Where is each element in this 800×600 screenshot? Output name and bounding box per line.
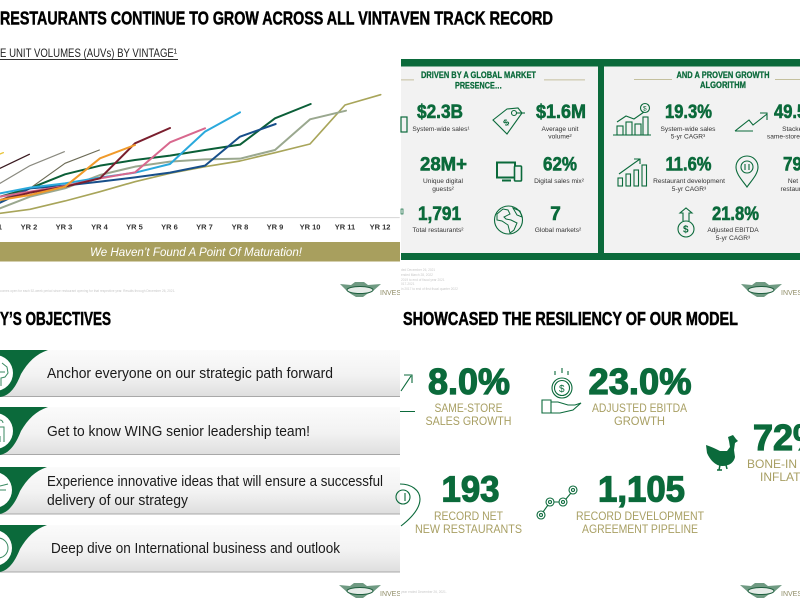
icon: money bag arrow xyxy=(678,208,694,237)
x-axis year labels: YR 6 xyxy=(161,222,178,232)
stat: adjusted EBITDA CAGR: 21.8% xyxy=(712,204,759,225)
stat: adjusted EBITDA growth: GROWTH xyxy=(614,414,665,428)
stat: net restaurants: Net xyxy=(788,178,798,185)
stat: average unit volume: volume² xyxy=(548,134,573,140)
footnote: comes open for each 52-week period since restaurant opening for that respective year. Results through December 26, 2021. xyxy=(0,289,175,293)
stat: restaurant development CAGR: 5-yr CAGR³ xyxy=(672,186,707,193)
stat: record net new restaurants: RECORD NET xyxy=(434,509,504,523)
stat: record net new restaurants: 193 xyxy=(442,468,500,510)
icon: money bag arrow: $ xyxy=(683,224,689,236)
heading: proven growth algorithm: AND A PROVEN GROWTH xyxy=(676,70,770,80)
stat: restaurant development CAGR xyxy=(653,154,725,193)
stat: global markets: Global markets² xyxy=(535,227,582,234)
stat: system-wide sales CAGR: System-wide sales xyxy=(661,126,716,133)
icon: growing bars xyxy=(618,159,646,186)
objective row 3: Experience innovative ideas that will ensure a successful xyxy=(47,474,383,490)
stat: global markets: 7 xyxy=(550,204,561,225)
stat: restaurant development CAGR: Restaurant development xyxy=(653,178,725,185)
x-axis year labels: YR 3 xyxy=(56,222,72,232)
footnotes xyxy=(401,268,458,291)
stat: net restaurants xyxy=(780,156,800,191)
heading: global market presence xyxy=(401,71,585,89)
title: restaurants continue to grow: RESTAURANTS CONTINUE TO GROW ACROSS ALL VINTA xyxy=(0,8,400,28)
panel: resiliency slide xyxy=(396,309,800,598)
stat: unique digital guests: guests² xyxy=(432,186,455,193)
footnotes: 2019 to end of fiscal year 2021 xyxy=(401,278,445,282)
stat: adjusted EBITDA CAGR: Adjusted EBITDA xyxy=(707,227,759,234)
logo: wings: INVESTOR xyxy=(380,290,416,297)
stat: system-wide sales: System-wide sales¹ xyxy=(412,126,470,133)
line chart: AUV by vintage xyxy=(0,95,399,218)
stat: same-store sales growth xyxy=(426,361,512,428)
stat: same-store sales growth: SAME-STORE xyxy=(434,401,502,415)
chart subtitle: E UNIT VOLUMES (AUVs) BY VINTAGE¹ xyxy=(0,46,177,60)
stat: adjusted EBITDA growth: ADJUSTED EBITDA xyxy=(592,401,687,415)
logo: wings xyxy=(340,282,400,297)
callout banner: maturation: We Haven’t Found A Point Of Maturation! xyxy=(90,247,303,259)
stat: unique digital guests: Unique digital xyxy=(423,178,464,185)
icon: price tag: $ xyxy=(501,117,511,128)
stat: average unit volume xyxy=(536,102,586,140)
stat: stacked same-store sales xyxy=(767,104,800,138)
stat: system-wide sales CAGR xyxy=(661,102,716,140)
icon: hand with coin: $ xyxy=(559,384,565,395)
stat: total restaurants xyxy=(400,206,464,232)
stat: unique digital guests: 28M+ xyxy=(420,154,467,176)
heading: proven growth algorithm: ALGORITHM xyxy=(700,80,746,90)
icon: connected nodes xyxy=(537,486,577,519)
stat: adjusted EBITDA CAGR: 5-yr CAGR³ xyxy=(716,235,751,242)
x-axis year labels: YR 11 xyxy=(335,222,355,232)
panel: proven track record slide xyxy=(400,8,800,297)
objective row 3: delivery of our strategy xyxy=(47,493,189,509)
stat: same-store sales growth: SALES GROWTH xyxy=(426,414,512,428)
panel: AUV growth chart slide xyxy=(0,8,416,297)
title: proven track record: VEN TRACK RECORD xyxy=(400,8,553,28)
stat: digital sales mix xyxy=(534,156,584,184)
icon: devices xyxy=(497,162,522,181)
title: objectives: Y’S OBJECTIVES xyxy=(0,309,111,329)
x-axis year labels: YR 9 xyxy=(267,222,283,232)
objective row 2 xyxy=(0,407,400,455)
x-axis year labels: YR 10 xyxy=(300,222,320,232)
footnotes: 017-2021 xyxy=(401,282,415,286)
stat: global markets xyxy=(535,206,582,232)
icon: growth arrow xyxy=(400,375,415,412)
logo: wings xyxy=(740,583,800,598)
stat: record development pipeline: 1,105 xyxy=(598,468,685,510)
footnotes: ded December 26, 2021 xyxy=(401,268,435,272)
objective row 4 xyxy=(0,525,400,572)
stat: total restaurants: 1,791 xyxy=(418,204,461,225)
x-axis year labels: YR 8 xyxy=(232,222,248,232)
logo: wings: INVESTOR xyxy=(380,591,416,598)
stat: record development pipeline: AGREEMENT PIPELINE xyxy=(582,522,698,536)
x-axis year labels xyxy=(0,224,390,230)
stat: adjusted EBITDA growth: 23.0% xyxy=(588,361,692,402)
stat: record net new restaurants: NEW RESTAURANTS xyxy=(415,522,522,536)
stat: system-wide sales CAGR: 19.3% xyxy=(665,102,712,123)
stat: system-wide sales CAGR: 5-yr CAGR³ xyxy=(671,134,706,140)
footnotes: ended March 28, 2022 xyxy=(401,273,433,277)
stat: restaurant development CAGR: 11.6% xyxy=(666,154,712,176)
footnotes: in 2017 to end of first fiscal quarter 2022 xyxy=(401,287,458,291)
x-axis year labels: YR 12 xyxy=(370,222,390,232)
heading: global market presence: DRIVEN BY A GLOBAL MARKET xyxy=(421,70,536,80)
stat: total restaurants: Total restaurants² xyxy=(413,227,464,234)
heading: global market presence: PRESENCE… xyxy=(455,80,502,90)
stat: adjusted EBITDA CAGR xyxy=(707,204,759,242)
stat: adjusted EBITDA growth xyxy=(588,361,692,428)
stat: same-store sales growth: 8.0% xyxy=(428,361,510,402)
x-axis year labels: YR 5 xyxy=(126,222,143,232)
objective row 4: Deep dive on International business and outlook xyxy=(51,541,341,557)
footnote: year ended December 26, 2021. xyxy=(401,590,447,594)
icon: bar chart with coin xyxy=(613,104,651,135)
logo: wings xyxy=(741,282,800,297)
stat: bone-in wing inflation xyxy=(747,417,800,484)
stat: average unit volume: Average unit xyxy=(542,126,579,133)
stat: digital sales mix: 62% xyxy=(543,154,577,176)
icon: hand with coin xyxy=(542,368,581,413)
x-axis year labels: YR 7 xyxy=(196,222,213,232)
panel: objectives slide xyxy=(0,309,416,598)
objective row 1: Anchor everyone on our strategic path forward xyxy=(47,366,333,382)
x-axis year labels: YR 4 xyxy=(91,222,109,232)
objective row 1 xyxy=(0,350,400,397)
objective row 3 xyxy=(0,467,400,514)
callout banner: maturation xyxy=(0,242,400,262)
frame: green bars xyxy=(401,59,800,260)
icon: globe xyxy=(494,206,522,234)
logo: wings xyxy=(339,583,416,598)
stat: average unit volume: $1.6M xyxy=(536,102,586,123)
stat: record development pipeline: RECORD DEVELOPMENT xyxy=(576,509,705,523)
icon: location pin xyxy=(736,156,758,187)
stat: digital sales mix: Digital sales mix² xyxy=(534,178,585,185)
x-axis year labels: YR 2 xyxy=(21,222,37,232)
stat: record development pipeline xyxy=(576,468,705,536)
stat: record net new restaurants xyxy=(415,468,522,536)
objective row 2: Get to know WING senior leadership team! xyxy=(47,424,310,440)
icon: price tag xyxy=(493,108,525,134)
icon: bar chart with coin: $ xyxy=(643,106,647,112)
stat: unique digital guests xyxy=(420,154,467,193)
stat: system-wide sales: $2.3B xyxy=(417,102,463,123)
icon: location pin with utensils xyxy=(396,484,420,526)
icon: trend arrow xyxy=(735,113,767,131)
icon: chicken xyxy=(706,435,738,470)
heading: proven growth algorithm xyxy=(634,71,800,88)
stat: system-wide sales xyxy=(401,102,470,133)
